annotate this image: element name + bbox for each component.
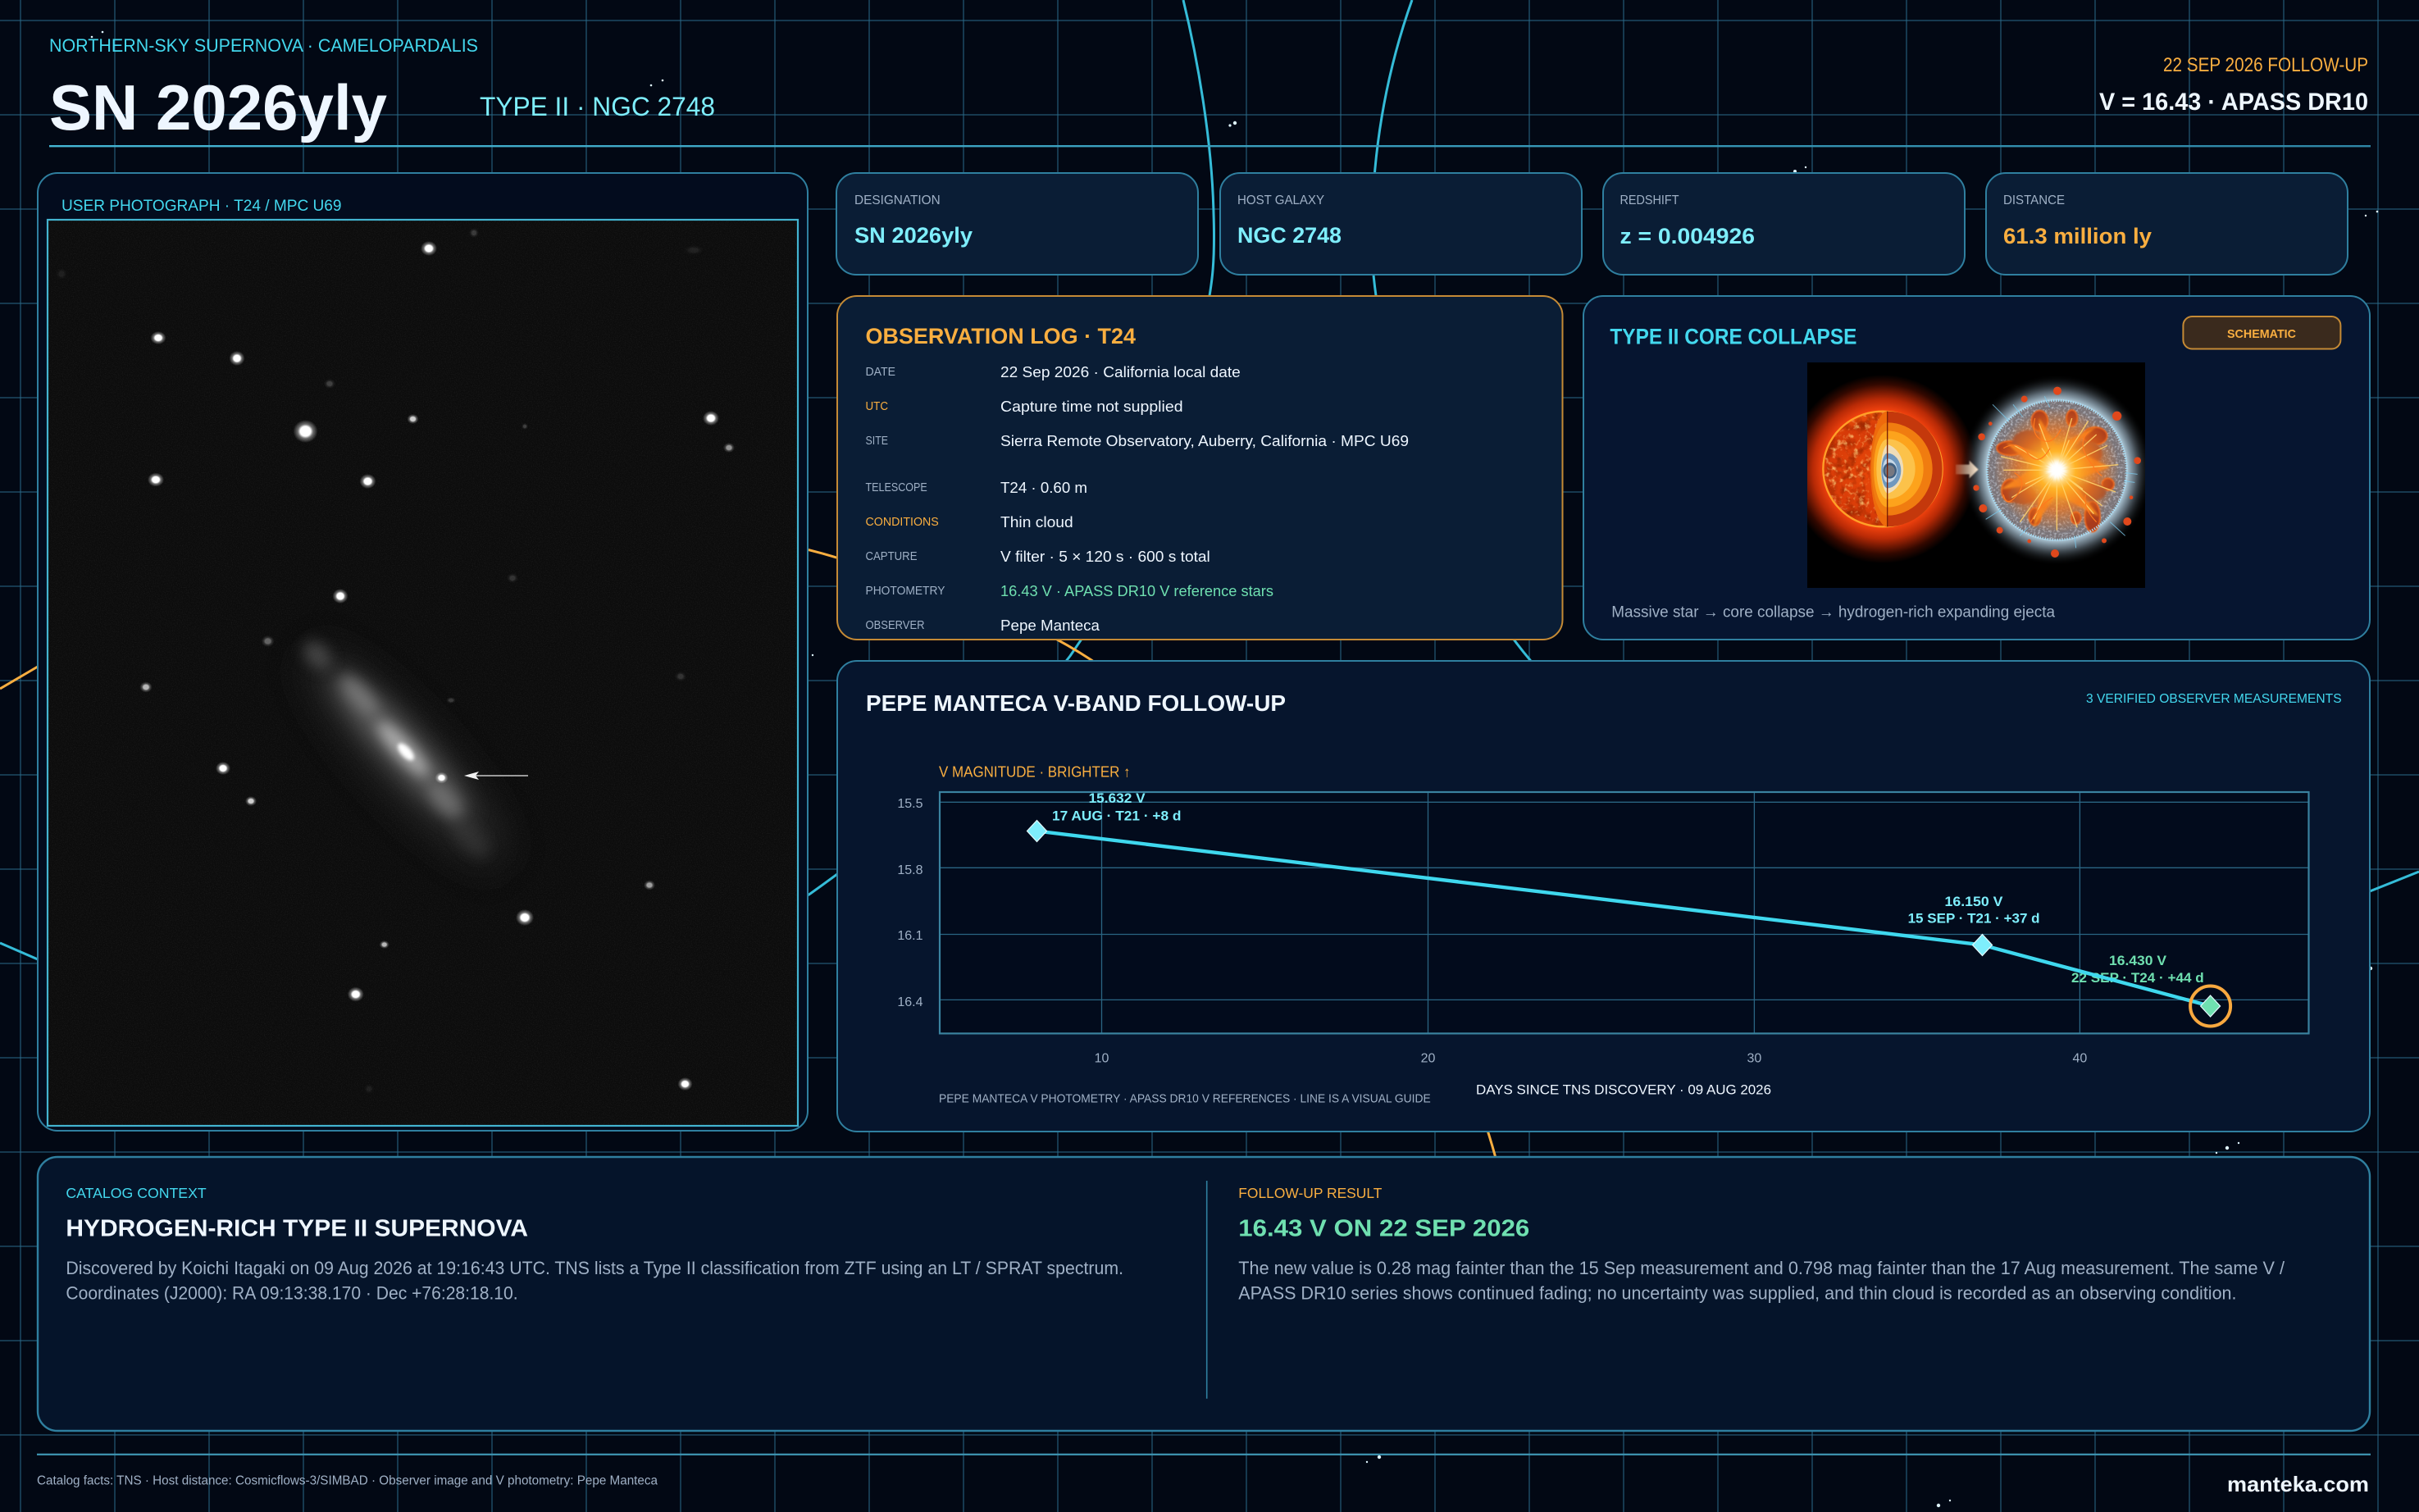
observation log heading: OBSERVATION LOG · T24 bbox=[866, 324, 1136, 348]
source credits: Catalog facts: TNS · Host distance: Cosmicflows-3/SIMBAD · Observer image and V photometry: Pepe Manteca bbox=[37, 1474, 658, 1488]
point label: 15 Sep: 15 SEP · T21 · +37 d bbox=[1908, 912, 2040, 927]
photo label: USER PHOTOGRAPH · T24 / MPC U69 bbox=[61, 198, 341, 215]
headline magnitude: V = 16.43 · APASS DR10 bbox=[2099, 89, 2368, 116]
data point: 15.632 V bbox=[1027, 820, 1046, 841]
row: telescope bbox=[866, 479, 1087, 496]
panel: V-band follow-up light curve bbox=[837, 661, 2370, 1132]
follow-up result text: APASS DR10 series shows continued fading; no uncertainty was supplied, and thin cloud is recorded as an observing condition. bbox=[1238, 1283, 2237, 1304]
stat card: host galaxy: NGC 2748 bbox=[1237, 223, 1342, 248]
catalog context text: Coordinates (J2000): RA 09:13:38.170 · Dec +76:28:18.10. bbox=[66, 1283, 518, 1304]
point label: 17 Aug: 17 AUG · T21 · +8 d bbox=[1052, 808, 1181, 823]
stat card: redshift bbox=[1603, 173, 1965, 275]
schematic illustration: massive star to explosion bbox=[1807, 362, 2145, 588]
catalog context text bbox=[66, 1185, 1123, 1304]
header bbox=[49, 35, 2371, 147]
stat card: designation bbox=[836, 173, 1198, 275]
row: photometry: PHOTOMETRY bbox=[866, 584, 945, 598]
point label: 22 Sep: 22 SEP · T24 · +44 d bbox=[2071, 971, 2204, 986]
ejecta bbox=[1973, 387, 2141, 558]
stat card: distance: 61.3 million ly bbox=[2003, 224, 2152, 248]
point label: 17 Aug: 15.632 V bbox=[1089, 791, 1146, 806]
row: site: SITE bbox=[866, 434, 888, 448]
row: capture: CAPTURE bbox=[866, 549, 917, 563]
exploding supernova bbox=[1973, 387, 2141, 558]
y-axis ticks: 16.1 bbox=[897, 929, 923, 943]
catalog context text: CATALOG CONTEXT bbox=[66, 1185, 207, 1201]
stat card: host galaxy bbox=[1220, 173, 1582, 275]
point label: 15 Sep: 16.150 V bbox=[1945, 895, 2002, 909]
row: utc: Capture time not supplied bbox=[1000, 398, 1183, 415]
stat card: distance bbox=[1986, 173, 2348, 275]
red supergiant, cutaway bbox=[1823, 412, 1943, 526]
footer bbox=[37, 1454, 2371, 1496]
row: date bbox=[866, 363, 1241, 380]
data point: 16.150 V bbox=[1973, 935, 1993, 956]
follow-up result text: 16.43 V ON 22 SEP 2026 bbox=[1238, 1215, 1529, 1241]
follow-up date: 22 SEP 2026 FOLLOW-UP bbox=[2163, 54, 2368, 76]
row: conditions: Thin cloud bbox=[1000, 513, 1073, 531]
telescope image of NGC 2748 bbox=[48, 221, 797, 1125]
row: capture: V filter · 5 × 120 s · 600 s total bbox=[1000, 548, 1210, 565]
panel: observation log bbox=[837, 296, 1563, 640]
point label: 15 Sep bbox=[1908, 895, 2040, 927]
chart footnote: PEPE MANTECA V PHOTOMETRY · APASS DR10 V REFERENCES · LINE IS A VISUAL GUIDE bbox=[939, 1093, 1431, 1106]
measurement count: 3 VERIFIED OBSERVER MEASUREMENTS bbox=[2086, 692, 2342, 706]
follow-up result text: The new value is 0.28 mag fainter than the 15 Sep measurement and 0.798 mag fainter than the 17 Aug measurement. The same V / bbox=[1238, 1258, 2285, 1278]
eyebrow: NORTHERN-SKY SUPERNOVA · CAMELOPARDALIS bbox=[49, 35, 478, 56]
stat card: distance: DISTANCE bbox=[2003, 194, 2065, 207]
row: site: Sierra Remote Observatory, Auberry, California · MPC U69 bbox=[1000, 432, 1409, 449]
y-axis ticks: 15.8 bbox=[897, 863, 923, 877]
x-axis ticks bbox=[1095, 1052, 2087, 1066]
stat card: host galaxy: HOST GALAXY bbox=[1237, 194, 1324, 207]
stat card: redshift: z = 0.004926 bbox=[1620, 224, 1755, 248]
y-axis ticks: 15.5 bbox=[897, 797, 923, 811]
highlight ring bbox=[2190, 986, 2230, 1027]
x-axis ticks: 10 bbox=[1095, 1052, 1109, 1066]
row: telescope: T24 · 0.60 m bbox=[1000, 479, 1087, 496]
subtitle: TYPE II · NGC 2748 bbox=[480, 92, 715, 121]
y-axis ticks bbox=[897, 797, 923, 1009]
point label: 22 Sep bbox=[2071, 954, 2204, 986]
stat card: redshift: REDSHIFT bbox=[1620, 194, 1679, 207]
point label: 17 Aug bbox=[1052, 791, 1181, 823]
stat card: designation: SN 2026yly bbox=[854, 223, 973, 248]
row: observer bbox=[866, 617, 1100, 634]
arrow marking the supernova bbox=[464, 772, 528, 780]
x-axis ticks: 30 bbox=[1747, 1052, 1761, 1066]
light curve line bbox=[1036, 831, 2211, 1006]
x-axis ticks: 40 bbox=[2073, 1052, 2087, 1066]
follow-up result text: FOLLOW-UP RESULT bbox=[1238, 1185, 1383, 1201]
catalog context text: Discovered by Koichi Itagaki on 09 Aug 2026 at 19:16:43 UTC. TNS lists a Type II classification from ZTF using an LT / SPRAT spectrum. bbox=[66, 1258, 1123, 1278]
catalog context text: HYDROGEN-RICH TYPE II SUPERNOVA bbox=[66, 1215, 528, 1241]
background orbit curves bbox=[0, 0, 2419, 1164]
row: observer: Pepe Manteca bbox=[1000, 617, 1100, 634]
y-axis ticks: 16.4 bbox=[897, 995, 923, 1009]
row: date: 22 Sep 2026 · California local date bbox=[1000, 363, 1241, 380]
field stars bbox=[56, 228, 735, 1094]
y-axis title: V MAGNITUDE · BRIGHTER ↑ bbox=[939, 763, 1131, 780]
row: capture bbox=[866, 548, 1210, 565]
data point: 16.430 V bbox=[2201, 995, 2221, 1017]
follow-up result text bbox=[1238, 1185, 2285, 1304]
x-axis title: DAYS SINCE TNS DISCOVERY · 09 AUG 2026 bbox=[1476, 1082, 1771, 1098]
row: utc: UTC bbox=[866, 399, 888, 413]
transition arrow bbox=[1956, 461, 1979, 478]
schematic badge bbox=[2183, 317, 2340, 349]
title: SN 2026yly bbox=[49, 71, 387, 143]
row: telescope: TELESCOPE bbox=[866, 480, 927, 494]
row: conditions bbox=[866, 513, 1073, 531]
schematic caption: Massive star → core collapse → hydrogen-rich expanding ejecta bbox=[1611, 604, 2055, 622]
stat card: designation: DESIGNATION bbox=[854, 194, 941, 207]
row: conditions: CONDITIONS bbox=[866, 515, 939, 529]
panel: catalog context and follow-up result bbox=[38, 1157, 2370, 1431]
panel heading: TYPE II CORE COLLAPSE bbox=[1610, 324, 1856, 348]
schematic badge: SCHEMATIC bbox=[2227, 327, 2296, 341]
panel: user photograph bbox=[38, 173, 808, 1131]
row: observer: OBSERVER bbox=[866, 618, 925, 632]
panel: type II core collapse bbox=[1583, 296, 2370, 640]
row: date: DATE bbox=[866, 365, 895, 379]
row: photometry bbox=[866, 582, 1273, 599]
row: photometry: 16.43 V · APASS DR10 V reference stars bbox=[1000, 582, 1273, 599]
point label: 22 Sep: 16.430 V bbox=[2109, 954, 2166, 968]
x-axis ticks: 20 bbox=[1421, 1052, 1435, 1066]
chart plot bbox=[897, 791, 2309, 1066]
site name: manteka.com bbox=[2227, 1472, 2369, 1496]
chart heading: PEPE MANTECA V-BAND FOLLOW-UP bbox=[866, 690, 1286, 716]
galaxy bbox=[297, 635, 506, 865]
row: utc bbox=[866, 398, 1183, 415]
